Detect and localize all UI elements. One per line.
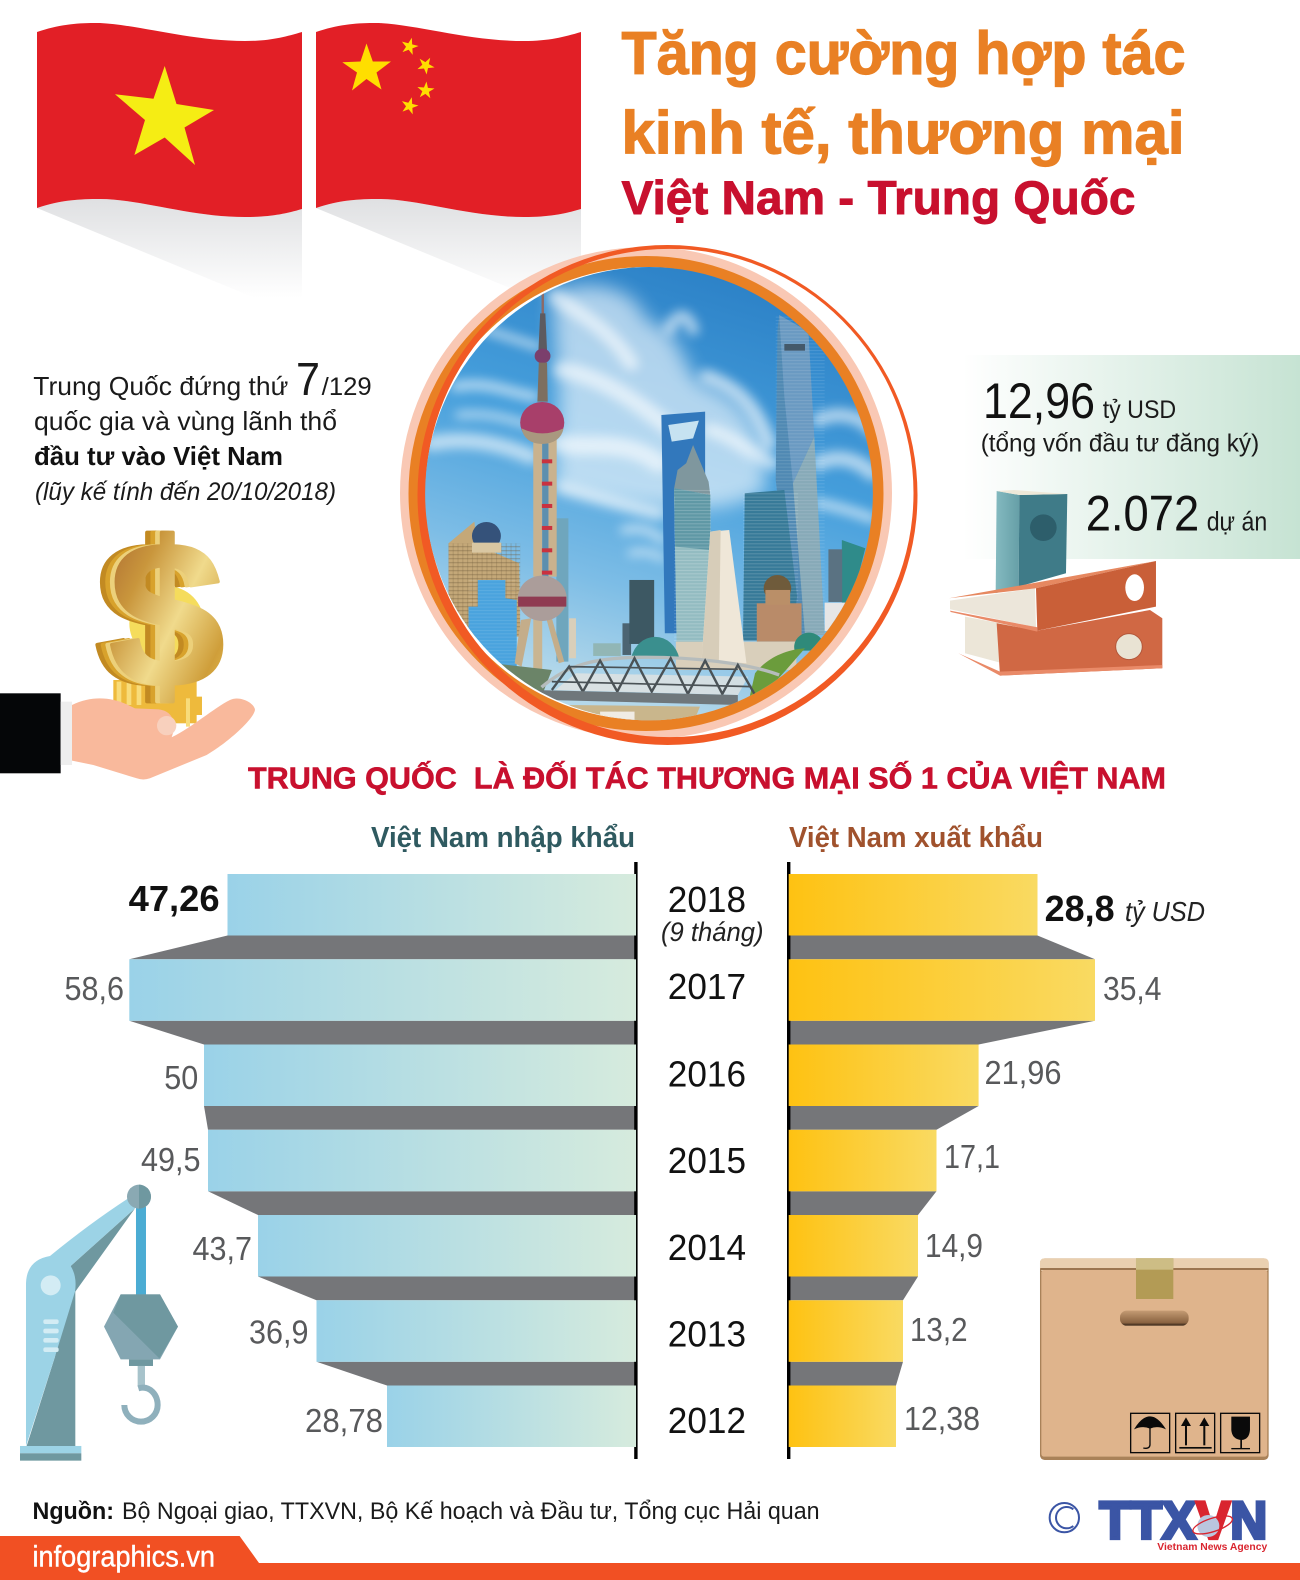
text block: China rank: Trung Quốc đứng thứ xyxy=(33,371,288,401)
section heading: TRUNG QUỐC LÀ ĐỐI TÁC THƯƠNG MẠI SỐ 1 CỦA VIỆT NAM xyxy=(248,759,1166,795)
Oriental Pearl Tower xyxy=(515,292,567,672)
panel: investment figures: 12,96 xyxy=(983,373,1095,429)
text block: China rank: /129 xyxy=(322,373,372,401)
export values: 35,4 xyxy=(1103,970,1162,1007)
logo: TTXVN: TTXVN xyxy=(1099,1492,1267,1551)
sleeve xyxy=(0,693,61,773)
panel: investment figures: 2.072 xyxy=(1086,486,1199,542)
import values xyxy=(64,878,383,1439)
left buildings xyxy=(449,522,520,673)
export values: tỷ USD xyxy=(1125,896,1205,927)
panel: investment figures: dự án xyxy=(1207,507,1267,537)
export values: 12,38 xyxy=(904,1400,980,1437)
import values: 58,6 xyxy=(64,970,124,1007)
flag: China xyxy=(316,23,581,298)
text block: China rank: đầu tư vào Việt Nam xyxy=(34,441,283,471)
text block: China rank: 7 xyxy=(296,353,320,405)
Waibaidu bridge xyxy=(533,657,779,723)
panel: investment figures: tỷ USD xyxy=(1103,396,1176,424)
text block: China rank: (lũy kế tính đến 20/10/2018) xyxy=(35,478,336,506)
footer bar xyxy=(0,1536,1300,1580)
import values: 36,9 xyxy=(249,1313,308,1350)
monument xyxy=(702,530,746,663)
chart column heading: imports: Việt Nam nhập khẩu xyxy=(371,822,635,854)
cuff xyxy=(61,702,72,765)
ground and trees, left xyxy=(502,664,552,694)
chart axis: exports xyxy=(787,862,790,1459)
export values xyxy=(904,888,1205,1437)
chart: export bars xyxy=(789,874,1095,1447)
icon: binders xyxy=(949,490,1162,676)
other buildings xyxy=(593,540,865,703)
import values: 28,78 xyxy=(305,1402,383,1439)
flag: Vietnam xyxy=(37,23,302,298)
year labels: 2017 xyxy=(668,966,746,1007)
dollar sign and coins: $ xyxy=(95,499,210,730)
dollar sign and coins: $ xyxy=(109,499,224,730)
mid tower xyxy=(743,490,798,641)
title: Tăng cường hợp tác xyxy=(622,20,1186,87)
export values: 21,96 xyxy=(984,1054,1062,1091)
icon: cardboard box xyxy=(1040,1258,1269,1460)
Shanghai World Financial Center xyxy=(661,412,705,633)
year labels: 2012 xyxy=(668,1400,746,1441)
Shanghai Tower xyxy=(776,315,825,635)
panel: investment figures: (tổng vốn đầu tư đăng ký) xyxy=(981,430,1259,458)
year labels: 2014 xyxy=(668,1227,746,1268)
dollar sign and coins: $ xyxy=(100,499,215,730)
export values: 13,2 xyxy=(910,1311,968,1348)
panel: investment figures xyxy=(963,355,1300,559)
ring frame around photo xyxy=(405,245,918,745)
source: Nguồn: xyxy=(32,1498,114,1525)
import values: 47,26 xyxy=(129,878,220,919)
hand xyxy=(72,698,255,779)
dollar sign and coins: $ xyxy=(105,499,220,730)
source: Bộ Ngoại giao, TTXVN, Bộ Kế hoạch và Đầu tư, Tổng cục Hải quan xyxy=(122,1498,820,1525)
icon: crane xyxy=(20,1185,178,1461)
import values: 49,5 xyxy=(141,1141,200,1178)
year labels: (9 tháng) xyxy=(661,917,764,947)
chart axis: imports xyxy=(634,862,638,1459)
text block: China rank: quốc gia và vùng lãnh thổ xyxy=(34,406,337,436)
icon: hand holding gold dollar xyxy=(0,499,255,779)
year labels: 2013 xyxy=(668,1313,746,1354)
import values: 50 xyxy=(164,1059,198,1096)
export values: 14,9 xyxy=(925,1227,983,1264)
year labels: 2018 xyxy=(668,879,746,920)
import values: 43,7 xyxy=(192,1230,252,1267)
title xyxy=(622,20,1186,224)
chart: import bars xyxy=(129,874,636,1447)
footer bar: infographics.vn xyxy=(32,1541,215,1574)
text block: China rank xyxy=(33,353,372,506)
clouds xyxy=(431,286,872,558)
year labels: 2016 xyxy=(668,1054,746,1095)
chart: exports connectors xyxy=(788,936,1095,1386)
chart column heading: exports: Việt Nam xuất khẩu xyxy=(789,822,1043,854)
chart: imports connectors xyxy=(129,936,636,1386)
Jin Mao tower xyxy=(674,445,711,642)
photo: Shanghai skyline xyxy=(421,263,879,727)
title: Việt Nam - Trung Quốc xyxy=(622,171,1136,224)
title: kinh tế, thương mại xyxy=(622,99,1184,166)
year labels: 2015 xyxy=(668,1140,746,1181)
export values: 28,8 xyxy=(1045,888,1115,929)
export values: 17,1 xyxy=(944,1138,1000,1175)
year labels xyxy=(661,879,764,1441)
background towers xyxy=(556,518,568,662)
logo: TTXVN: Vietnam News Agency xyxy=(1157,1542,1268,1553)
